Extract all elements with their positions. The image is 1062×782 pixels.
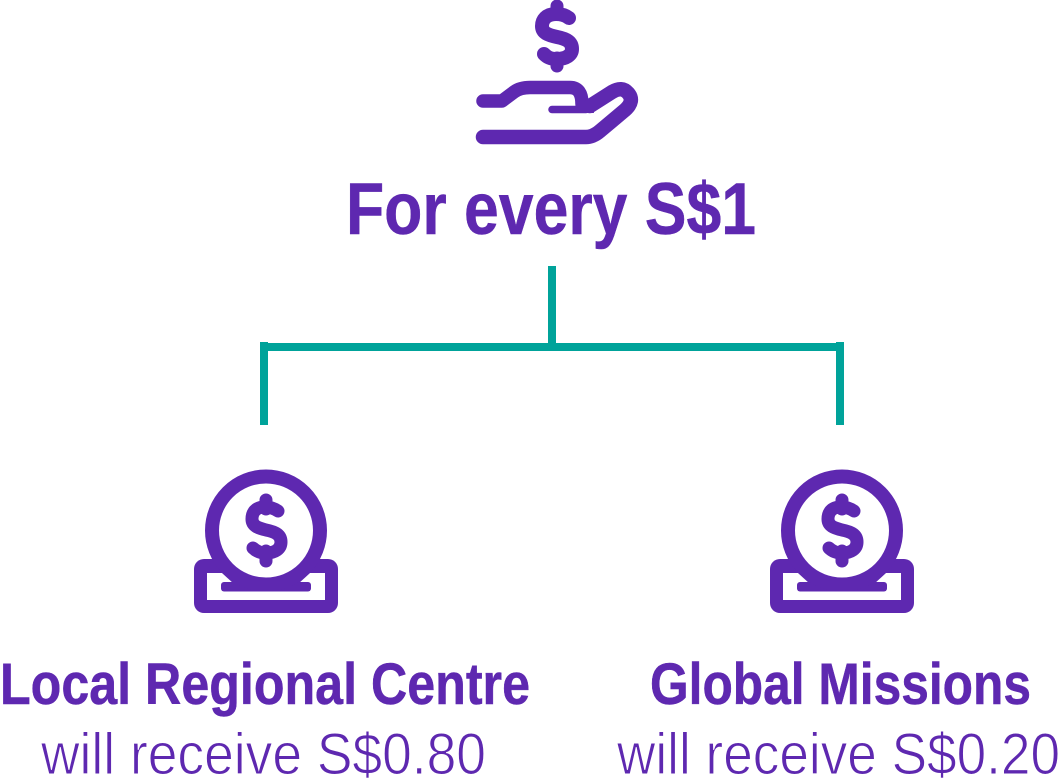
connector: branching lines (260, 266, 844, 425)
icon: coin into slot, global (770, 476, 914, 613)
label: Local Regional Centre: Local Regional Centre (0, 652, 530, 717)
icon: coin into slot, local (194, 476, 338, 613)
icon: hand holding dollar (483, 6, 631, 137)
heading: For every S$1: For every S$1 (346, 169, 756, 250)
